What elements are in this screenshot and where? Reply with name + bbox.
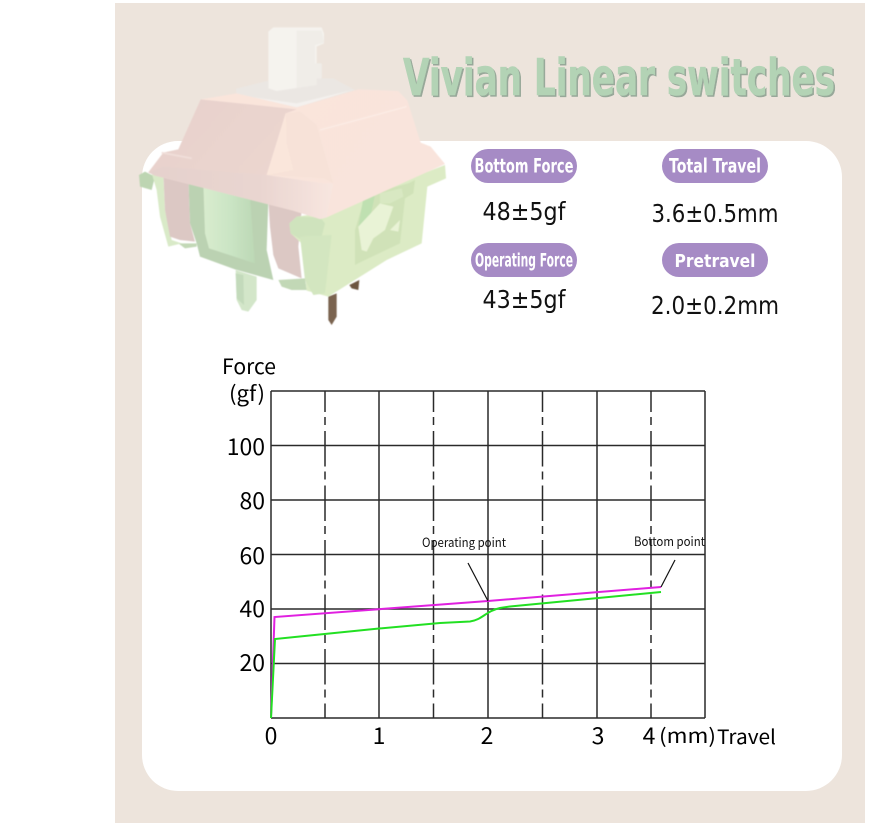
curve: green <box>271 592 661 718</box>
switch pins <box>178 243 359 325</box>
spec: operating force <box>471 243 577 314</box>
switch lower housing right <box>289 165 446 297</box>
y axis ticks: 80 <box>239 482 265 516</box>
callout: operating point <box>422 532 506 601</box>
y axis ticks <box>227 428 265 678</box>
axis label: force <box>222 351 276 408</box>
spec: bottom force: Bottom Force <box>474 154 574 178</box>
curve: pink <box>271 587 661 718</box>
x axis ticks <box>265 717 776 751</box>
x axis ticks: 0 <box>265 717 277 751</box>
axis label: force: (gf) <box>229 378 265 408</box>
spec: total travel: Total Travel <box>669 154 761 178</box>
y axis ticks: 100 <box>227 428 265 462</box>
y axis ticks: 60 <box>239 537 265 571</box>
axis label: force: Force <box>222 351 276 381</box>
spec: pretravel <box>651 243 779 320</box>
spec: operating force: 43±5gf <box>482 285 567 314</box>
x axis ticks: 3 <box>592 717 604 751</box>
spec: pretravel: 2.0±0.2mm <box>651 291 779 320</box>
x axis ticks: 2 <box>481 717 493 751</box>
spec: operating force: Operating Force <box>475 250 573 272</box>
switch top housing <box>148 89 445 219</box>
panel: white card <box>142 141 842 791</box>
callout: bottom point <box>634 531 705 587</box>
spec: bottom force: 48±5gf <box>482 197 567 226</box>
x axis ticks: 1 <box>373 717 385 751</box>
chart: force vs travel <box>222 351 776 751</box>
callout: operating point: Operating point <box>422 532 506 551</box>
switch stem <box>236 27 355 107</box>
y axis ticks: 40 <box>239 590 265 624</box>
icon: switch illustration <box>139 27 446 325</box>
x axis ticks: Travel <box>717 721 776 750</box>
spec: bottom force <box>471 149 577 226</box>
callout: bottom point: Bottom point <box>634 531 705 550</box>
switch lower housing left <box>139 172 302 280</box>
spec: total travel: 3.6±0.5mm <box>652 199 778 228</box>
y axis ticks: 20 <box>239 644 265 678</box>
x axis ticks: (mm) <box>659 720 716 749</box>
spec: pretravel: Pretravel <box>674 251 756 272</box>
x axis ticks: 4 <box>643 717 656 751</box>
spec: total travel <box>652 149 778 228</box>
